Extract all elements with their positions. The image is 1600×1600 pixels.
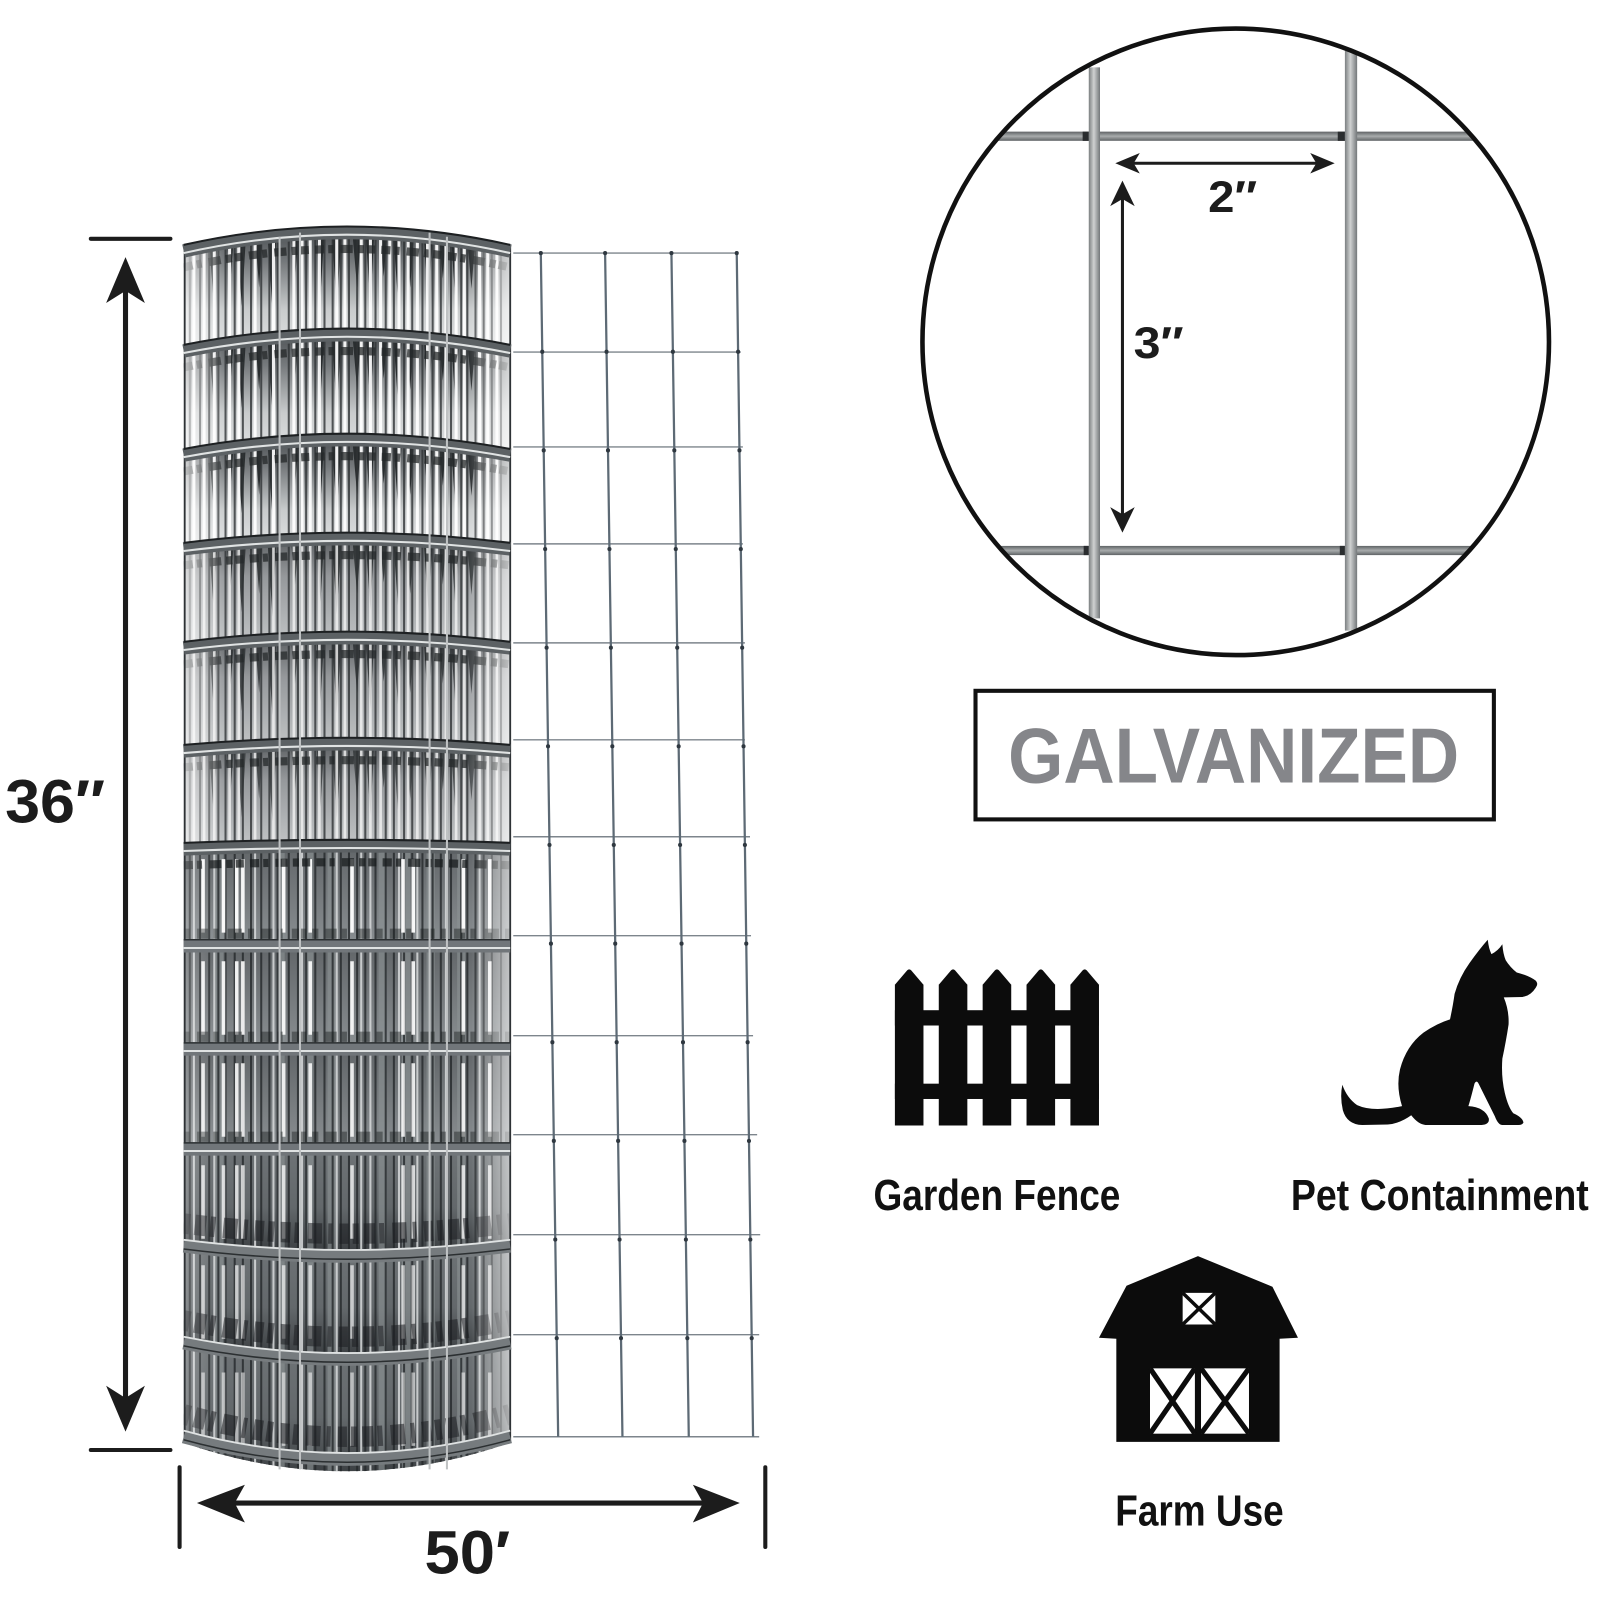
wide grey wires in lower rows: [219, 843, 461, 1500]
height dimension arrow: [91, 239, 170, 1450]
barn doors: [1150, 1368, 1195, 1434]
width dimension arrow: [180, 1467, 765, 1547]
softer white wires in middle rows: [194, 543, 497, 843]
2 inch label: 2″: [1208, 171, 1257, 222]
3 inch label: 3″: [1134, 317, 1184, 368]
icon: dog: [1341, 940, 1537, 1125]
width label: 50′: [424, 1518, 510, 1586]
mesh wires: [995, 51, 1474, 631]
tapered wire shadows in upper rows: [210, 239, 474, 306]
roll hoop wires: [184, 227, 510, 1462]
height label: 36″: [5, 767, 105, 835]
unrolled fence mesh: [513, 253, 760, 1437]
2 inch arrow: [1115, 153, 1335, 173]
jagged shadow under upper hoops: [184, 249, 510, 865]
3 inch arrow: [1110, 181, 1135, 533]
thin light wires in lower rows: [194, 843, 480, 1500]
barn loft window: [1183, 1293, 1215, 1324]
white vertical wires in upper rows: [194, 214, 497, 543]
dark vertical wires: [190, 214, 501, 1500]
bright gaps in lower rows: [203, 859, 490, 933]
mottled coil shadow in lower rows: [184, 934, 510, 1137]
icon: garden fence: [895, 969, 1099, 1126]
icon: barn: [1099, 1256, 1298, 1442]
detail circle: mesh size: [922, 29, 1549, 655]
long wires crossing over the hoops: [280, 233, 447, 1469]
galvanized badge: GALVANIZED: [1008, 714, 1459, 800]
galvanized badge: [976, 691, 1494, 819]
roll outer edge wires: [185, 245, 510, 1443]
garden fence label: Garden Fence: [873, 1171, 1120, 1220]
farm use label: Farm Use: [1115, 1487, 1284, 1536]
wire fence roll: [184, 204, 510, 1502]
